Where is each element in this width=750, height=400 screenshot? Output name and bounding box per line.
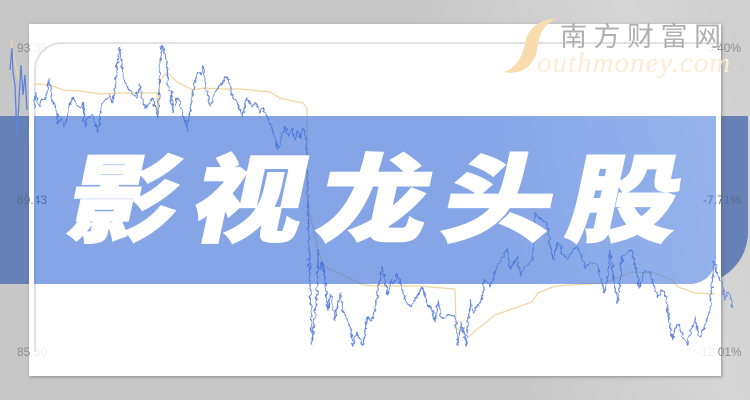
watermark Chinese name: 南方财富网: [560, 22, 728, 52]
watermark logo: southmoney: [504, 18, 731, 79]
watermark url: outhmoney.com: [537, 47, 731, 79]
dark blue background band: [0, 116, 748, 284]
average cost line: [11, 40, 715, 337]
chart frame outline: [34, 42, 721, 352]
axis label: bottom right percent: -12.01%: [697, 345, 742, 359]
light blue title band: [34, 116, 716, 284]
icon: orange swoosh S: [504, 18, 558, 73]
axis label: top left value: 93.36: [17, 41, 47, 55]
main title: 影视龙头股: [59, 148, 706, 255]
price line main: [34, 45, 733, 345]
axis label: bottom left value: 85.50: [17, 345, 47, 359]
axis label: middle left value: 89.43: [17, 193, 47, 207]
price line left stub: [10, 48, 27, 138]
axis label: middle right percent: -7.71%: [703, 193, 741, 207]
axis label: top right percent: -3.40%: [703, 41, 741, 55]
